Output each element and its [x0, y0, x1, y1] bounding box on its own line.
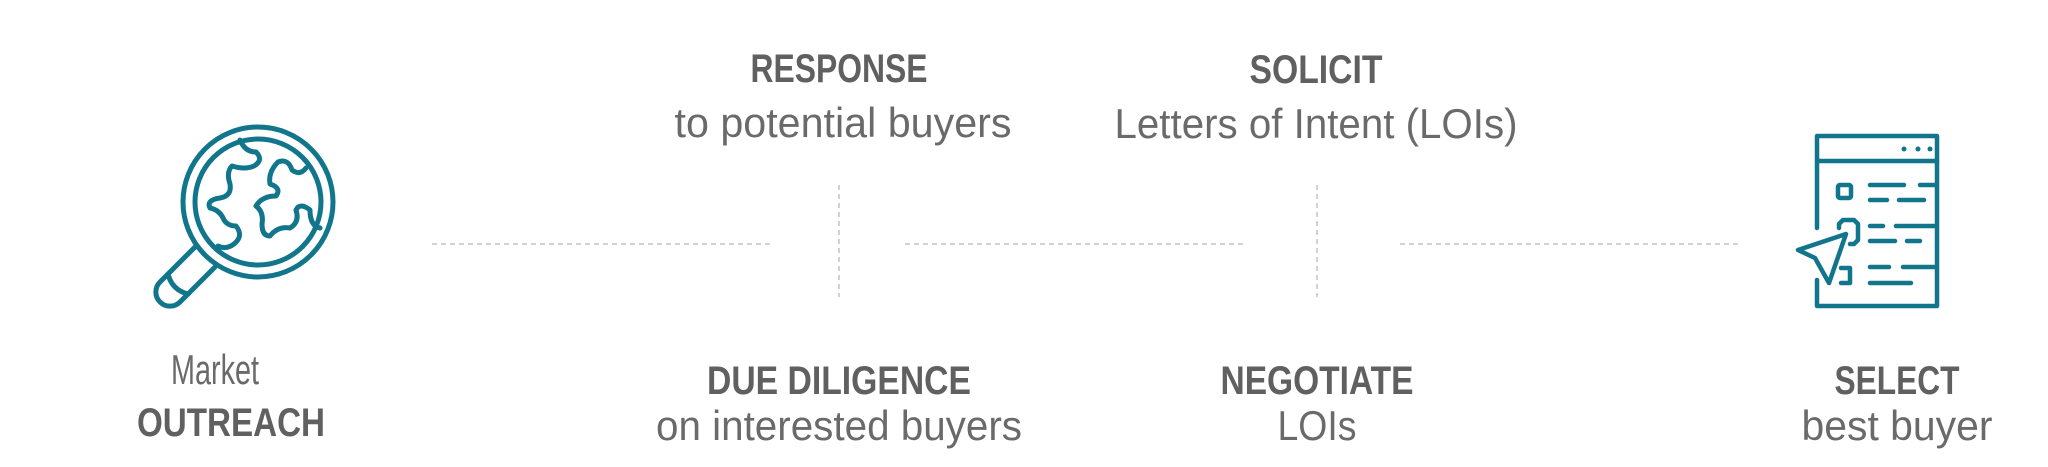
- step: solicit: [1114, 48, 1518, 147]
- icon: magnifier with globe: [156, 127, 333, 306]
- step: solicit: SOLICIT: [1250, 48, 1382, 92]
- step: select: best buyer: [1802, 402, 1993, 449]
- step: market outreach: [137, 346, 325, 445]
- step: solicit: Letters of Intent (LOIs): [1114, 100, 1518, 147]
- step: due diligence: [656, 359, 1022, 449]
- step: market outreach: OUTREACH: [137, 401, 325, 445]
- step: negotiate: LOIs: [1278, 402, 1356, 449]
- step: due diligence: on interested buyers: [656, 402, 1022, 449]
- step: due diligence: DUE DILIGENCE: [707, 359, 971, 403]
- step: select: SELECT: [1834, 359, 1960, 403]
- step: response: to potential buyers: [674, 99, 1012, 146]
- step: negotiate: [1220, 359, 1414, 449]
- icon: form with cursor: [1798, 136, 1937, 306]
- step: negotiate: NEGOTIATE: [1220, 359, 1414, 403]
- step: market outreach: Market: [171, 346, 259, 393]
- step: response: [674, 47, 1012, 146]
- step: select: [1802, 359, 1993, 449]
- step: response: RESPONSE: [750, 47, 928, 91]
